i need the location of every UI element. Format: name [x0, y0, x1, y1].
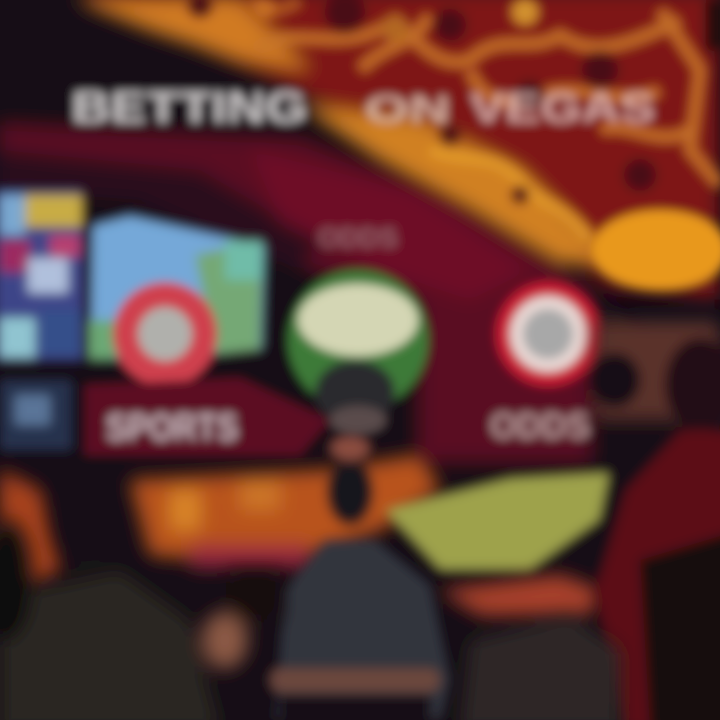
person: centre silhouette — [275, 436, 450, 720]
small left screen — [0, 380, 72, 450]
icon: red chip right — [496, 282, 600, 386]
icon: green and white globe — [288, 270, 428, 434]
people: left foreground — [0, 478, 280, 720]
ceiling: golden lights — [75, 0, 720, 300]
chair back — [270, 668, 440, 720]
ceiling: gold oval sign — [592, 210, 720, 290]
label text right: ODDS — [490, 405, 590, 446]
right glow — [595, 320, 720, 420]
people: right foreground — [460, 615, 620, 720]
title: VEGAS — [470, 84, 655, 131]
right table glow — [440, 575, 600, 615]
label panel: left — [85, 378, 330, 455]
title: BETTING — [72, 83, 307, 132]
panel: left screen — [0, 190, 83, 360]
person: right in red — [591, 339, 720, 720]
panel: centre-left screen with chip — [88, 215, 265, 386]
ceiling: lattice strokes — [250, 0, 720, 240]
title — [72, 83, 655, 132]
small sign text: ODDS — [318, 222, 398, 253]
green field screen — [385, 472, 610, 570]
orange crowd band — [0, 455, 440, 590]
icon: red chip — [113, 282, 217, 386]
ceiling: dark red spots — [188, 0, 720, 203]
title: ON — [365, 89, 450, 131]
label text: SPORTS — [106, 407, 238, 449]
